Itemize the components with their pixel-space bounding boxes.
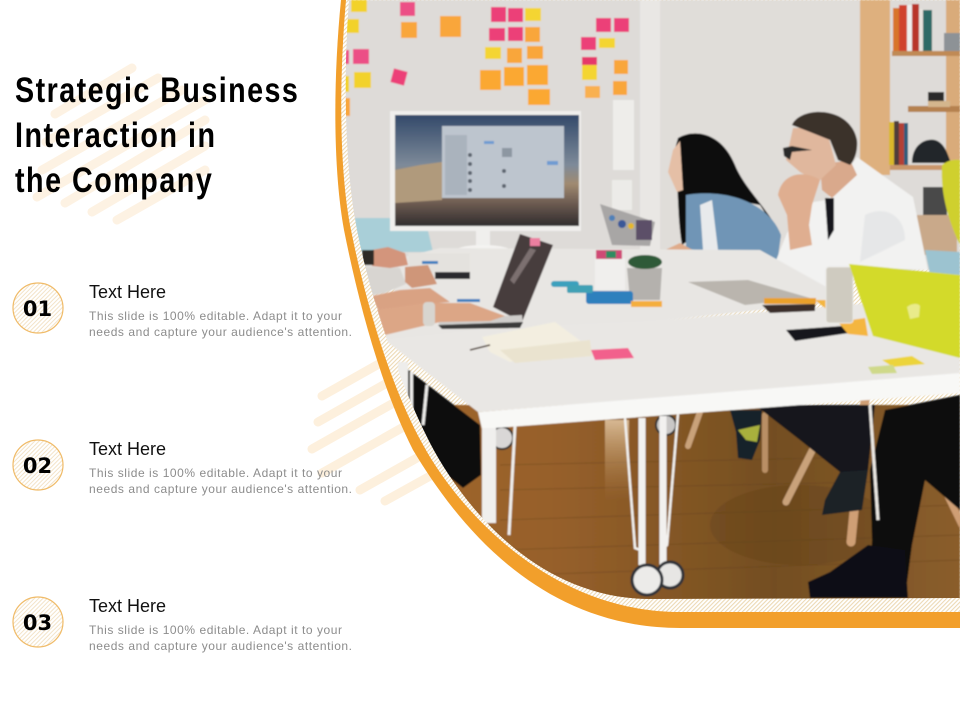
number badge 01 [13, 283, 63, 333]
back table top [385, 248, 850, 340]
pen cup and plant [595, 250, 662, 300]
item 03 [13, 596, 352, 653]
man in white shirt [775, 112, 928, 297]
title [15, 70, 298, 200]
description 02: This slide is 100% editable. Adapt it to your [89, 466, 342, 480]
chair legs [688, 400, 960, 542]
blue chair [355, 218, 433, 252]
description 01 [89, 309, 352, 339]
phones and notes [762, 298, 925, 374]
laptop with stickers [600, 204, 655, 246]
pink note [591, 348, 634, 360]
decorative stripes lower left [312, 352, 450, 501]
hatched curved band [341, 0, 960, 612]
description 03: This slide is 100% editable. Adapt it to your [89, 623, 342, 637]
silver laptop [688, 280, 810, 305]
glass [826, 267, 853, 323]
orange curved band [335, 0, 960, 628]
title: Interaction in [15, 115, 215, 155]
open book [470, 322, 592, 363]
photo: office meeting [340, 0, 960, 600]
title: the Company [15, 160, 212, 200]
bookshelf [860, 0, 960, 275]
blue desk items [551, 281, 662, 307]
number badge 02: 02 [23, 454, 52, 478]
description 02: needs and capture your audience's attention. [89, 482, 352, 496]
yellow laptop [849, 264, 960, 358]
front table edge [478, 373, 960, 429]
woman in denim jacket [665, 133, 781, 273]
number badge 03 [13, 597, 63, 647]
heading 03: Text Here [89, 596, 166, 616]
left open laptop [438, 234, 553, 329]
number badge 03: 03 [23, 611, 52, 635]
table legs and wheels [482, 405, 878, 595]
sticky notes [343, 0, 629, 116]
front table top [385, 304, 960, 412]
wall [340, 0, 960, 270]
item 01 [13, 282, 352, 339]
description 03 [89, 623, 352, 653]
heading 01: Text Here [89, 282, 166, 302]
number badge 02 [13, 440, 63, 490]
arms and hands on table [362, 247, 505, 335]
wooden floor [340, 405, 960, 600]
description 01: needs and capture your audience's attention. [89, 325, 352, 339]
decorative stripes behind title [37, 68, 205, 220]
heading 02: Text Here [89, 439, 166, 459]
legs and shoes under table [398, 362, 960, 598]
number badge 01: 01 [23, 297, 52, 321]
title: Strategic Business [15, 70, 298, 110]
description 02 [89, 466, 352, 496]
monitor [390, 111, 581, 259]
far wheels [491, 415, 676, 449]
item 02 [13, 439, 352, 496]
description 03: needs and capture your audience's attention. [89, 639, 352, 653]
description 01: This slide is 100% editable. Adapt it to your [89, 309, 342, 323]
